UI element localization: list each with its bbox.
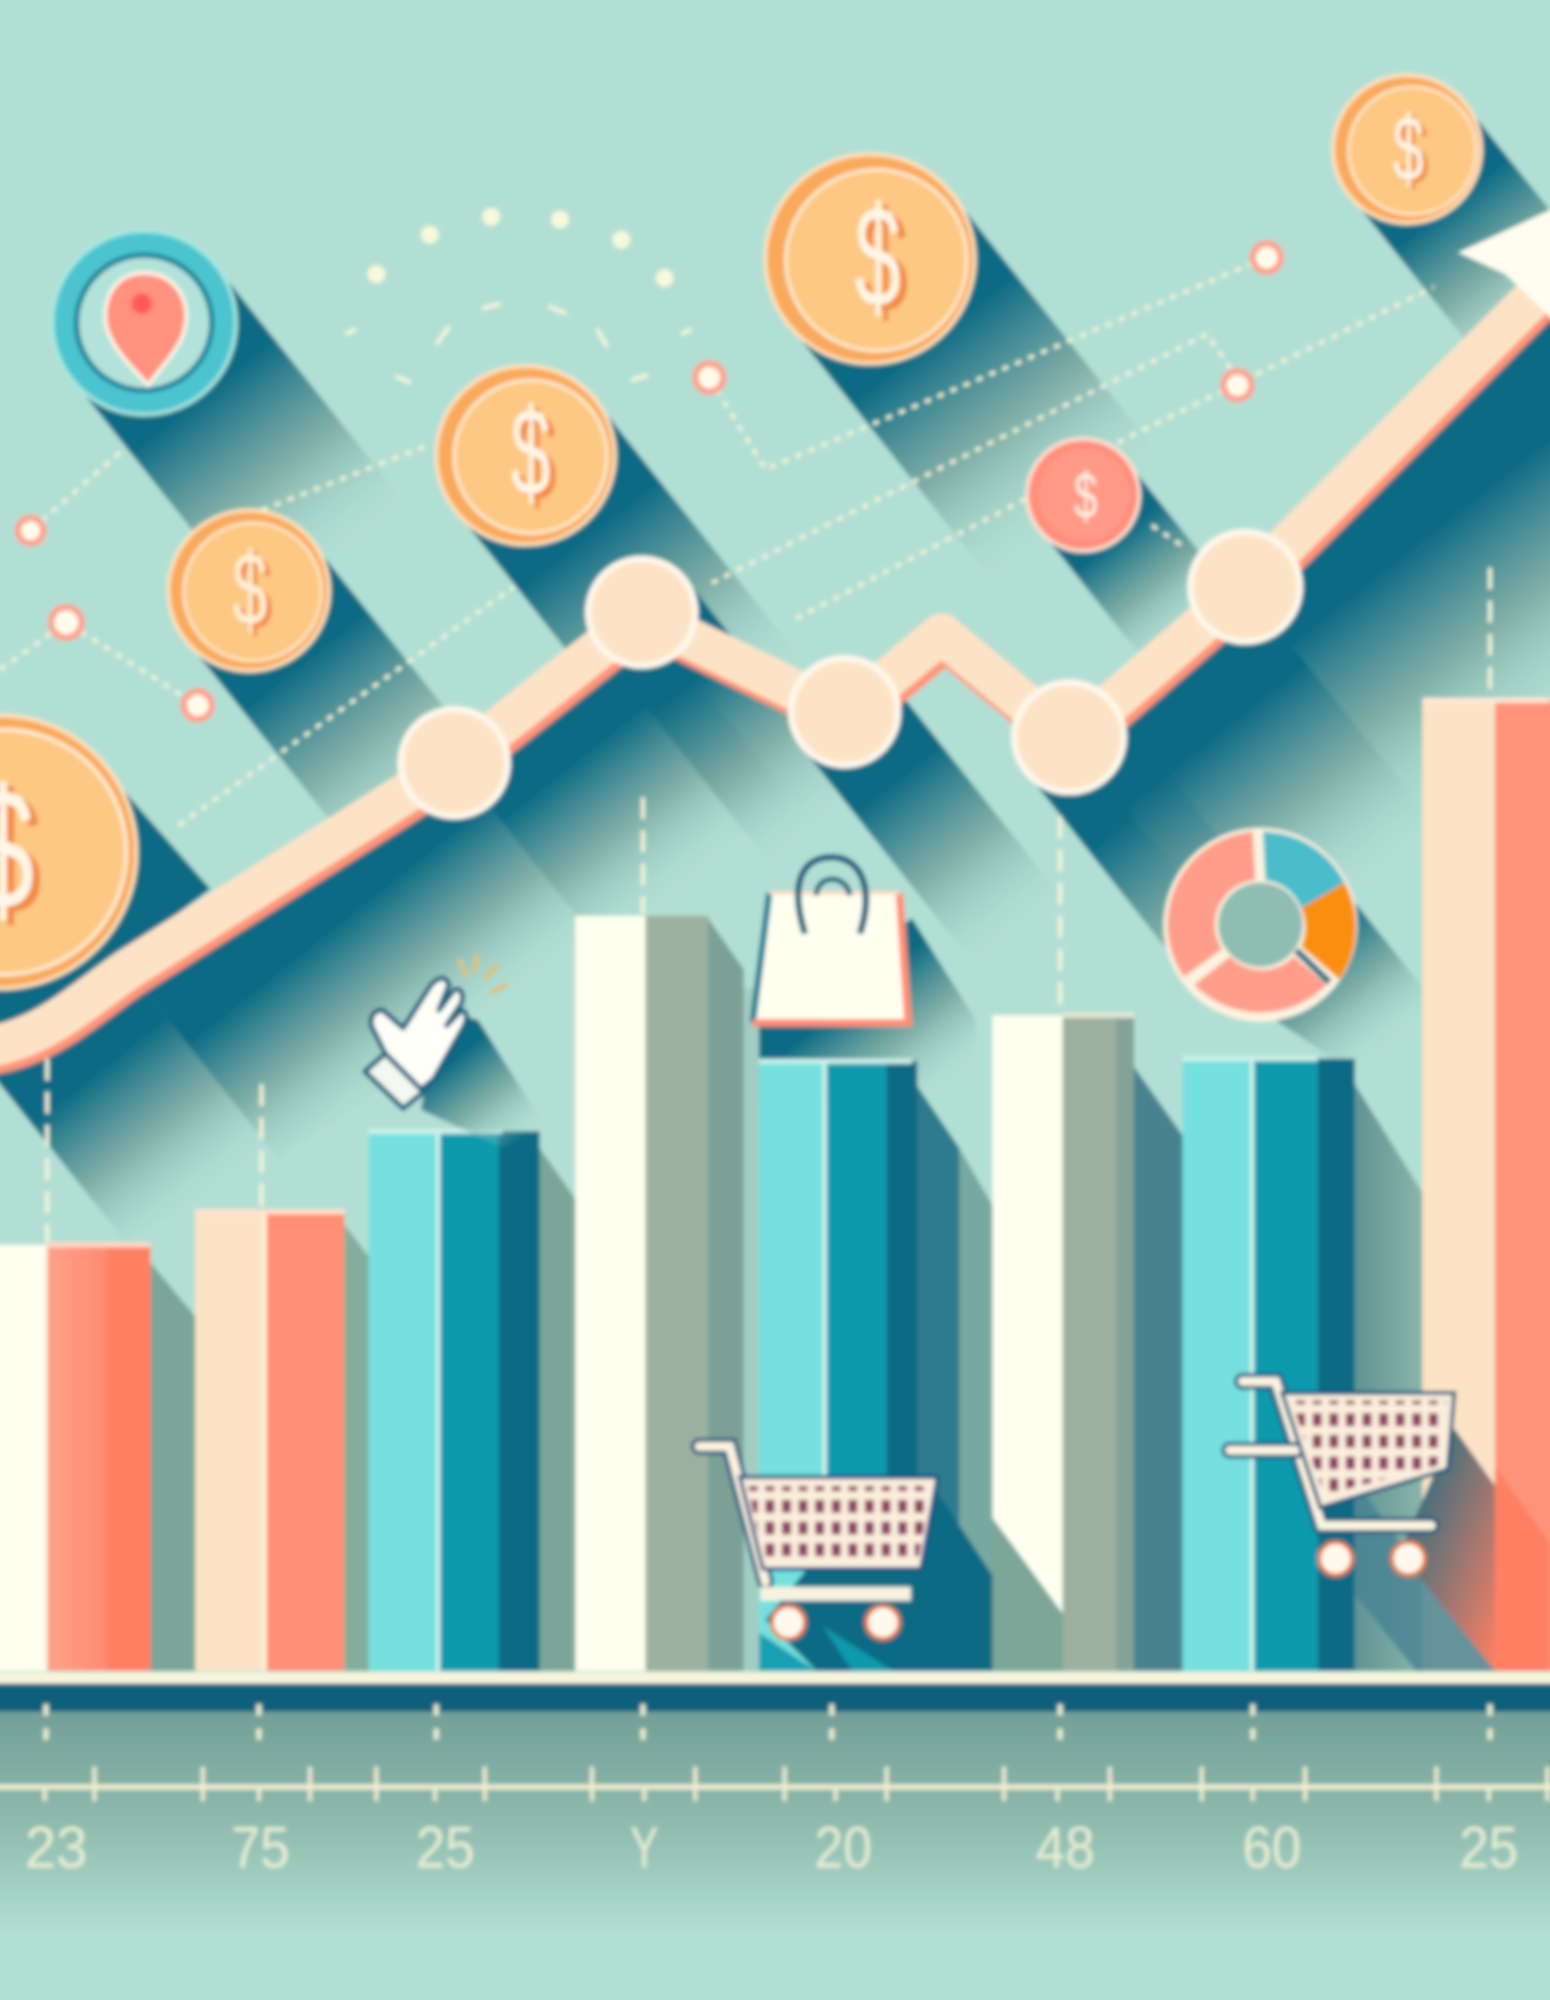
axis labels: 20: [815, 1815, 872, 1880]
dotted connector lines: [0, 259, 1434, 825]
bar 7: [1183, 1056, 1355, 1671]
bar 2: [195, 1209, 344, 1671]
bar 5: [759, 1059, 917, 1671]
coin: left: [168, 510, 329, 671]
coin: bottom left: [0, 716, 137, 989]
bar shadows: [151, 918, 1422, 1671]
axis labels: 48: [1036, 1815, 1095, 1880]
bar 6: [993, 1013, 1134, 1671]
coin: small red: $: [1074, 460, 1097, 532]
bar chart: [0, 698, 1550, 1671]
long shadows of coins and trend line: [0, 103, 1550, 1241]
coin: centre: $: [511, 382, 551, 522]
coin: top centre: [765, 154, 975, 364]
coin: top centre: $: [855, 176, 901, 337]
bar 4: [575, 916, 708, 1671]
dotted arc: [346, 208, 691, 383]
axis labels: 25: [1459, 1815, 1518, 1880]
icon: pointing hand cursor: [365, 954, 542, 1148]
axis labels: 23: [25, 1815, 87, 1880]
icon: location pin badge: [52, 231, 236, 415]
coin: left: $: [238, 535, 273, 652]
coin: centre: $: [517, 387, 557, 527]
icon: donut chart: [1163, 828, 1357, 1022]
icon shadows behind bars: [753, 867, 1429, 1122]
coin: centre: [436, 366, 615, 545]
x axis: [0, 1672, 1550, 1935]
arrow head: [1458, 204, 1550, 329]
ruler: [0, 1767, 1550, 1801]
bar 3: [369, 1129, 540, 1671]
icon: shopping bag: [753, 857, 908, 1023]
axis guide dashes: [46, 1704, 1490, 1745]
icon: shopping cart centre: [699, 1446, 938, 1639]
dashed guide lines: [47, 568, 1490, 1242]
coin: top right: $: [1393, 97, 1424, 200]
network nodes: [18, 244, 1281, 719]
axis labels: 25: [416, 1815, 475, 1880]
bar 1: [0, 1242, 151, 1671]
axis labels: 75: [231, 1815, 290, 1880]
axis labels: 60: [1243, 1815, 1301, 1880]
coin: small red: [1027, 439, 1139, 551]
coin: top right: [1333, 75, 1481, 223]
coin: top centre: $: [862, 181, 908, 342]
icon: shopping cart right: [1230, 1381, 1454, 1575]
trend line: [0, 268, 1550, 1056]
coin: top right: $: [1398, 101, 1429, 204]
coin: left: $: [233, 532, 267, 648]
axis labels: Y: [630, 1815, 658, 1880]
bar 8: [1422, 698, 1550, 1671]
cart shadows over bars: [759, 1429, 1550, 1671]
axis labels: [25, 1815, 1518, 1880]
trend line markers: [401, 532, 1300, 816]
